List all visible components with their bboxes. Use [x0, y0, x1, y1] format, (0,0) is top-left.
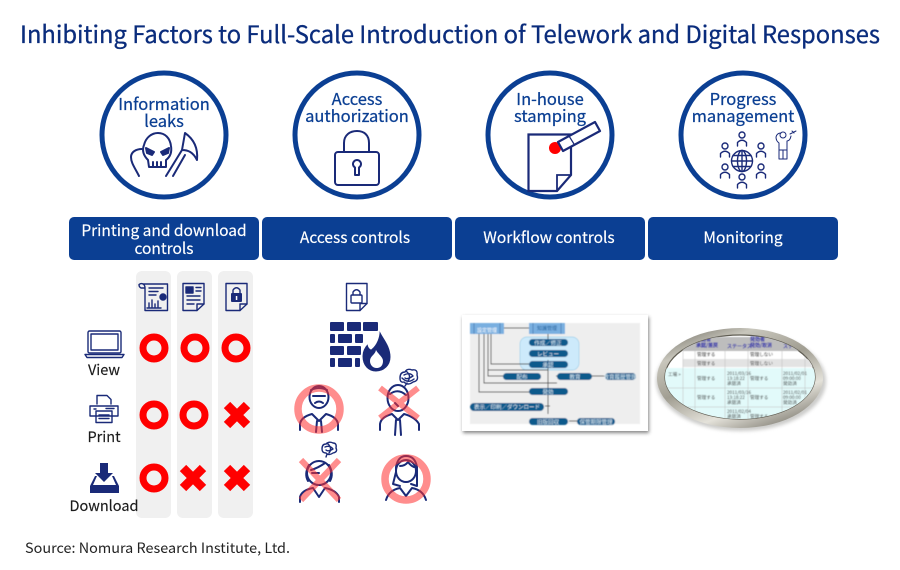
monitoring table: 2011/02/01 — [783, 371, 807, 377]
heading bar: monitoring — [648, 217, 838, 260]
heading bar: workflow controls: Workflow controls — [483, 226, 615, 248]
monitoring table: 09:00:00 — [783, 395, 801, 401]
panel: access controls illustration — [298, 284, 427, 502]
label: progress management: management — [692, 103, 794, 127]
monitoring table: 管理しない — [750, 360, 773, 367]
monitoring table: ステータス — [727, 343, 752, 350]
icon: locked document — [346, 284, 367, 310]
heading bar: access controls: Access controls — [300, 226, 410, 248]
monitoring table: 13:18:22 — [727, 376, 745, 382]
panel: in-house stamping circle — [488, 73, 612, 197]
workflow chart: 教育 — [569, 373, 581, 381]
workflow chart: 設定管理 — [477, 327, 497, 334]
column: personal documents — [177, 271, 212, 518]
heading bar: access controls — [262, 217, 452, 260]
monitoring table: 管理する — [697, 375, 715, 382]
monitoring table: 工場 > — [668, 371, 681, 378]
label: information leaks: leaks — [144, 108, 184, 132]
monitoring table: 承認済 — [727, 380, 741, 387]
icon: skull with scythe — [131, 133, 197, 176]
workflow chart: レビュー — [537, 350, 559, 358]
row: download: Download — [69, 495, 139, 516]
panel: access authorization circle — [295, 73, 419, 197]
monitoring table: 管理する — [750, 375, 768, 382]
monitoring table: 2011/02/04 — [727, 409, 751, 415]
person: rejected man with scribble — [380, 369, 419, 435]
monitoring table: ステータス — [783, 343, 808, 350]
row: print: Print — [87, 426, 121, 447]
row: view: View — [88, 359, 120, 380]
icon: padlock — [335, 131, 379, 185]
column: locked documents — [218, 271, 253, 518]
workflow chart: 発効 — [542, 388, 554, 396]
row: view — [85, 331, 247, 380]
source note: Source: Nomura Research Institute, Ltd. — [25, 538, 290, 558]
workflow chart: 表示／印刷／ダウンロード — [474, 403, 540, 411]
monitoring table: 2011/03/16 — [727, 371, 751, 377]
row: download — [69, 463, 247, 516]
monitoring table: 2011/02/01 — [783, 390, 807, 396]
monitoring table: 発効/取消 — [750, 342, 772, 349]
monitoring table: 2011/03/16 — [727, 390, 751, 396]
column: report documents — [136, 271, 171, 518]
workflow chart: 承認 — [542, 361, 554, 369]
heading bar: printing and download controls: Printing and download — [81, 219, 247, 241]
monitoring table: 管理する — [750, 413, 768, 420]
panel: workflow diagram screenshot — [462, 315, 649, 433]
monitoring table: 承認者 — [696, 336, 711, 343]
monitoring table: 発効済 — [783, 399, 797, 406]
row: print — [87, 396, 247, 447]
monitoring table: 発効済 — [783, 380, 797, 387]
label: information leaks: Information — [118, 91, 210, 115]
person: approved woman — [385, 456, 427, 500]
panel: printing and download matrix — [69, 271, 253, 518]
label: access authorization: authorization — [305, 103, 409, 127]
workflow chart: 配布 — [516, 373, 528, 381]
monitoring table: 管理する — [697, 360, 715, 367]
monitoring table — [665, 336, 815, 419]
workflow chart: 知識管理 — [537, 325, 557, 332]
panel: monitoring table in oval lens — [656, 328, 826, 431]
label: in-house stamping: In-house — [516, 86, 584, 110]
workflow chart — [470, 323, 640, 426]
title: Inhibiting Factors to Full-Scale Introduction of Telework and Digital Responses — [20, 15, 880, 50]
monitoring table: 09:00:00 — [783, 376, 801, 382]
person: rejected woman with scribble — [300, 442, 339, 502]
monitoring table: 管理する — [750, 394, 768, 401]
workflow chart: 作成／修正 — [534, 339, 562, 347]
monitoring table: 発効者 — [750, 336, 765, 343]
icon: people around globe — [720, 131, 796, 188]
label: access authorization: Access — [332, 86, 383, 110]
label: in-house stamping: stamping — [514, 103, 587, 127]
heading bar: printing and download controls — [69, 217, 259, 260]
panel: progress management circle — [681, 73, 805, 197]
monitoring table: 承認済 — [727, 413, 741, 420]
heading bar: workflow controls — [455, 217, 645, 260]
monitoring table: 承認/差戻 — [696, 342, 718, 349]
label: progress management: Progress — [710, 86, 777, 110]
workflow chart: 教育履歴管理 — [603, 373, 637, 381]
heading bar: monitoring: Monitoring — [703, 226, 783, 248]
monitoring table: 管理する — [697, 394, 715, 401]
icon: stamped document — [528, 122, 600, 191]
panel: information leaks circle — [102, 73, 226, 197]
monitoring table: 承認済 — [727, 399, 741, 406]
heading bar: printing and download controls: controls — [134, 237, 194, 259]
person: approved man — [298, 386, 340, 432]
workflow chart: 旧版回収 — [537, 418, 559, 426]
workflow chart: 保管期限管理 — [579, 418, 613, 426]
icon: firewall — [330, 322, 391, 372]
monitoring table: 管理しない — [750, 351, 773, 358]
monitoring table: 13:18:22 — [727, 395, 745, 401]
monitoring table: 管理する — [697, 351, 715, 358]
